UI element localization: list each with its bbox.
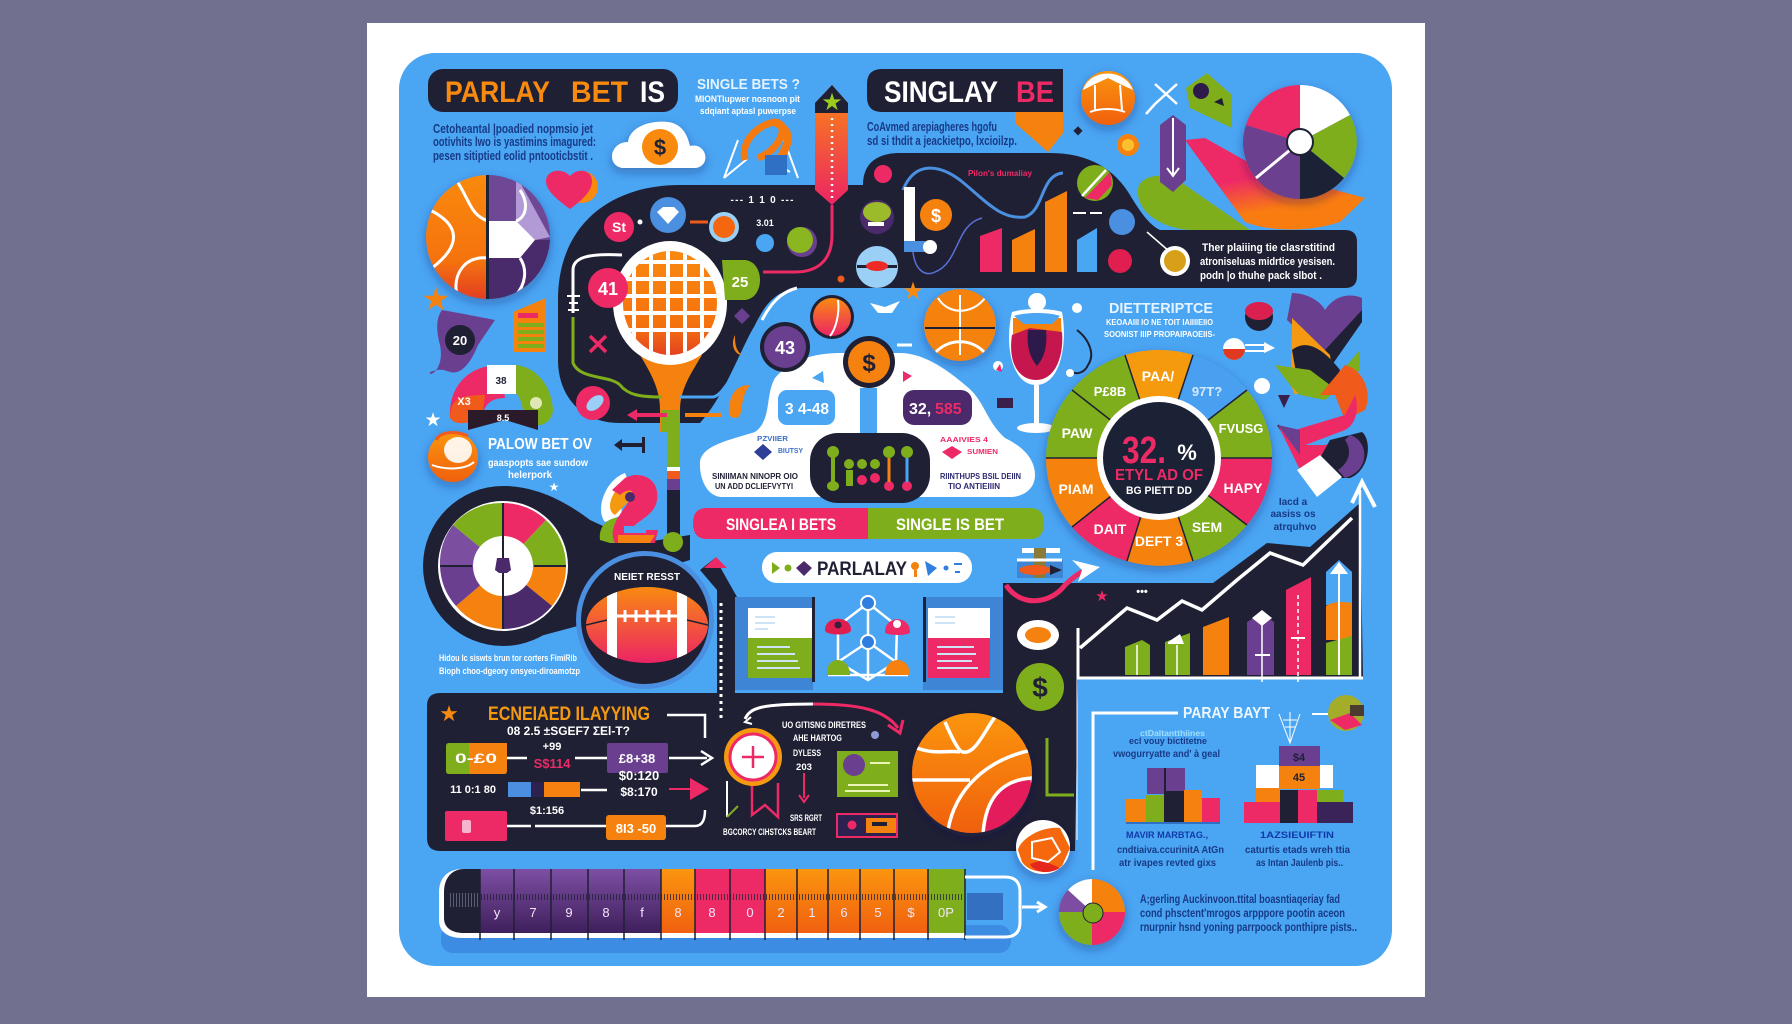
lower right heading: PARAY BAYT (1183, 705, 1270, 722)
medal text: 203 (796, 762, 812, 772)
white hook (904, 187, 915, 245)
caption left blocks: MAVIR MARBTAG., (1126, 830, 1208, 840)
icon: white X (1146, 84, 1177, 114)
parlalay pill: PARLALAY (817, 559, 907, 580)
pie wedge (453, 503, 503, 566)
lower panel title: ECNEIAED ILAYYING (488, 704, 650, 725)
medal text: SRS RGRT (790, 813, 822, 823)
donut labels: 97T? (1192, 384, 1222, 399)
ruler labels: 7 (529, 905, 537, 920)
palow bet note: PALOW BET OV (488, 436, 592, 453)
wine glass (1009, 293, 1064, 433)
segment (1159, 390, 1272, 458)
closing paragraph: rnurpnir hsnd yoning parrpoock ponthipre pists.. (1140, 920, 1357, 934)
bar (1326, 560, 1352, 675)
ruler labels: 0 (746, 905, 754, 920)
bar (1247, 613, 1274, 675)
callout text: Ther plaiiing tie clasrstitind (1202, 242, 1335, 254)
icon: purple location pin: 20 (453, 333, 467, 348)
box: purple: £8+38 (619, 751, 655, 766)
network diagram (825, 596, 910, 680)
stacked blocks right: $4 (1293, 752, 1306, 764)
node: blue diamond (650, 197, 686, 233)
singles bar: SINGLE IS BET (896, 515, 1005, 534)
node: orange dot (838, 276, 844, 282)
dark pin chart (810, 433, 930, 503)
label: Pilon's dumaliay (968, 168, 1032, 178)
header right: SINGLAY (884, 76, 998, 109)
stacked blocks left (1126, 768, 1220, 824)
node: pink small (874, 165, 892, 183)
donut labels: SEM (1192, 519, 1222, 535)
donut labels: PIAM (1058, 481, 1094, 497)
segment (1159, 355, 1247, 458)
bar (1203, 617, 1229, 675)
single bets note: MIONTIupwer nosnoon pit (695, 94, 801, 105)
parlalay pill (762, 552, 972, 583)
small cloud text left: BIUTSY (778, 446, 803, 455)
bar (1286, 577, 1311, 675)
rainbow gauge: 38 (495, 376, 507, 387)
value box: 34-48 (778, 390, 835, 425)
intro text right: CoAvmed arepiagheres hgofu (867, 120, 997, 134)
box: orange: 8I3 -50 (616, 821, 656, 836)
small cloud text right: TIO ANTIEIIIN (948, 482, 1000, 491)
big basketball (912, 713, 1040, 835)
header right: BE (1016, 76, 1054, 109)
box: purple (607, 743, 668, 773)
description heading: KEOAAIII IO NE TOIT IAIIIIEIIO (1106, 317, 1213, 327)
stacked blocks right: 45 (1293, 772, 1305, 784)
node: green ball (787, 227, 817, 257)
icon: top right ball (1081, 71, 1135, 125)
segment (1125, 350, 1193, 458)
caption right blocks: caturtis etads wreh ttia (1245, 845, 1350, 856)
pie wedge (440, 566, 503, 606)
ruler labels (494, 905, 954, 920)
intro text right: sd si thdit a jeackietpo, lxcioilzp. (867, 134, 1017, 148)
closing paragraph: cond phsctent'mrogos arpppore pootin aceon (1140, 906, 1345, 920)
caption left blocks: cndtiaiva.ccurinitA AtGn (1117, 845, 1224, 856)
ruler labels: 2 (777, 905, 785, 920)
top right ribbon graphic (1138, 115, 1365, 230)
donut labels: DEFT 3 (1135, 533, 1183, 549)
ruler labels: 0P (938, 905, 954, 920)
palow bet note: helerpork (508, 470, 552, 481)
connector lines (507, 715, 707, 826)
note near chart: aasiss os (1270, 509, 1316, 520)
icon: ball arrow (1223, 338, 1275, 360)
caption left blocks (1117, 830, 1224, 869)
closing paragraph: A;gerling Auckinvoon.ttital boasntiaqeriay fad (1140, 892, 1340, 906)
pink triangle marker (704, 557, 727, 568)
medal text: BGCORCY CIHSTCKS BEART (723, 827, 816, 837)
top right pie (1243, 85, 1357, 199)
icon: flame (729, 385, 750, 418)
green L connector (1047, 738, 1074, 795)
label: 11 0:1 80 (450, 784, 496, 796)
pink curved arrow (1006, 548, 1100, 601)
green card (837, 751, 898, 797)
small cloud text right: RIINTHUPS BSIL DEIIN (940, 472, 1021, 481)
box: pink (445, 811, 507, 841)
trend line (1080, 518, 1352, 648)
dollar coin (843, 336, 895, 388)
ruler labels: 6 (840, 905, 848, 920)
caption right blocks: 1AZSIEUIFTIN (1260, 830, 1334, 840)
pie wedge (456, 566, 503, 629)
dotted connector (720, 603, 722, 722)
big basketball left (426, 175, 550, 299)
bar: tricolour (508, 782, 580, 797)
donut labels: ETYL AD OF (1115, 467, 1203, 484)
purple 43 bubble: 43 (775, 338, 795, 358)
football badge (576, 551, 714, 689)
lower right note: ecl vouy bictitetne (1129, 736, 1207, 747)
small cloud text right: SUMIEN (967, 447, 998, 456)
ruler labels: 9 (565, 905, 573, 920)
pie wedge (503, 520, 566, 566)
description heading: SOONIST IIIP PROPAIPAOEIIS- (1104, 329, 1215, 339)
segment (1046, 390, 1159, 458)
intro text right (867, 120, 1017, 148)
ruler labels: 8 (602, 905, 610, 920)
icon: purple location pin (430, 310, 495, 374)
card: pink (928, 608, 990, 678)
icon: dark arrow (614, 437, 645, 453)
arrow: pink (669, 778, 709, 800)
icon: cloud with dollar coin (612, 122, 705, 168)
pink node (1108, 249, 1132, 273)
top chart in network (903, 165, 1135, 274)
donut labels (1058, 368, 1263, 549)
singles bar: SINGLEA I BETS (726, 515, 836, 534)
donut labels: FVUSG (1219, 421, 1263, 436)
pink 41 bubble: 41 (598, 279, 618, 299)
dollar coin: $ (931, 206, 941, 226)
icon: pink X (590, 336, 606, 352)
small cloud text left: PZVIIER (757, 434, 789, 443)
lower panel title (439, 701, 650, 738)
icon: small arrow tree (1279, 712, 1300, 743)
node: blue ball (856, 246, 898, 288)
icon: heart (546, 171, 598, 209)
segment (1046, 458, 1159, 527)
intro text left: ootivhits lwo is yastimins imagured: (433, 134, 596, 149)
note near chart: Iacd a (1279, 497, 1308, 508)
pie wedge (503, 503, 546, 566)
dark vertical and lower panel (427, 503, 1363, 851)
medal text: UO GITISNG DIRETRES (782, 720, 866, 730)
small cloud text left: SINIIMAN NINOPR OIO (712, 472, 798, 481)
intro text left (433, 121, 596, 163)
ruler labels: f (640, 905, 644, 920)
header left: PARLAY (445, 76, 550, 109)
card: green (748, 608, 812, 678)
description heading (1104, 300, 1215, 339)
donut labels: DAIT (1094, 521, 1127, 537)
icon: green dollar button: $ (1032, 672, 1048, 703)
icon: orange crescent (733, 335, 742, 355)
note under pie: Hidou Ic siswts brun tor corters FimiRib (439, 653, 577, 664)
label: S$114 (534, 756, 571, 771)
node: small blue (756, 234, 774, 252)
network path lines (567, 255, 768, 397)
stub: orange (685, 413, 722, 417)
bar (1077, 228, 1097, 272)
node: green purple ball (860, 200, 894, 234)
caption right blocks: as Intan Jaulenb pis.. (1256, 858, 1343, 869)
ruler labels: y (494, 905, 501, 920)
pie wedge (503, 566, 566, 606)
flow diagram (445, 715, 712, 841)
icon: dark diamond: ◆ (1073, 123, 1083, 137)
description heading: DIETTERIPTCE (1109, 300, 1213, 317)
dark network panel (558, 153, 1357, 423)
segment (1072, 458, 1159, 561)
green 25 tab (722, 260, 760, 300)
icon: white boat (870, 301, 900, 313)
singles bar (693, 508, 1044, 539)
panel edge line (1076, 678, 1078, 840)
medal text: AHE HARTOG (793, 733, 842, 743)
racket (613, 240, 727, 552)
palow bet note: gaaspopts sae sundow (488, 458, 588, 469)
closing paragraph (1140, 892, 1357, 934)
note under pie: Bioph choo-dgeory onsyeu-diroamotzp (439, 666, 580, 677)
note near chart (1270, 497, 1316, 533)
green 25 tab: 25 (732, 274, 748, 291)
segment (1159, 458, 1272, 525)
small cloud text left (712, 434, 803, 491)
segment (1127, 458, 1193, 566)
header left: BET (571, 76, 628, 109)
ruler shadow (441, 925, 1011, 953)
axes (1078, 628, 1363, 678)
network nodes (576, 165, 898, 421)
decor: dots: ••• (1136, 586, 1148, 598)
icon: coin (1117, 134, 1139, 156)
icon: small ball with line (1312, 695, 1364, 731)
icon: cloud with dollar coin: $ (654, 135, 666, 160)
icon: white star: ★ (424, 410, 442, 431)
header left: IS (640, 76, 665, 109)
box: orange (606, 815, 666, 840)
bar (980, 228, 1002, 272)
blue stem in cloud (860, 388, 877, 436)
lower panel title: ★ (439, 701, 459, 726)
node: orange ball (709, 212, 739, 242)
callout text (1147, 232, 1335, 282)
label: $1:156 (530, 805, 564, 817)
donut labels: HAPY (1224, 480, 1263, 496)
donut chart (1046, 350, 1272, 566)
medal text: DYLESS (793, 748, 821, 758)
small cloud text left: UN ADD DCLIEFVYTYI (715, 482, 793, 491)
icon: small purple arrow (734, 308, 750, 324)
label: 110: --- 1 1 0 --- (730, 195, 794, 206)
icon: ball node (576, 386, 610, 420)
hook foot (904, 241, 925, 252)
ruler labels: 5 (874, 905, 882, 920)
ribbon marker with star: ★ (821, 89, 843, 116)
icon: orange ring on stand (724, 122, 798, 178)
label: $8:170 (620, 785, 658, 799)
rainbow gauge (450, 365, 553, 430)
value box: 32,585: 585 (935, 401, 962, 418)
icon: orange star: ★ (422, 281, 450, 317)
value box: 34-48: 3 4-48 (785, 401, 829, 418)
icon: small blue triangle (812, 371, 824, 383)
lower right section frame (1093, 713, 1178, 870)
node: St (604, 212, 634, 242)
note near chart: atrquhvo (1274, 522, 1316, 533)
ruler (439, 869, 965, 940)
rainbow gauge: X3 (457, 396, 471, 408)
donut labels: % (1177, 440, 1197, 465)
small decor gear (871, 731, 879, 739)
single bets note: SINGLE BETS ? (697, 76, 800, 93)
dollar coin: $ (862, 350, 876, 377)
ruler bracket and arrow (965, 877, 1045, 937)
intro text left: pesen sitiptied eolid pntooticbstit . (433, 148, 593, 163)
ring pie chart (423, 486, 583, 646)
icon: green dollar button (1016, 663, 1064, 711)
icon: eye (1017, 620, 1059, 650)
donut labels: BG PIETT DD (1126, 485, 1192, 497)
icon: stylised number 2 (600, 473, 658, 543)
icon: green tag (1186, 73, 1232, 128)
blue panel (399, 53, 1392, 966)
icon: red button (1245, 302, 1273, 331)
segment (1072, 355, 1159, 458)
bar (1012, 229, 1035, 272)
small tag card (837, 814, 897, 837)
decor: pink star: ★ (1095, 588, 1109, 605)
caption right blocks (1245, 830, 1350, 869)
label: 3.01: 3.01 (756, 218, 774, 228)
rainbow gauge: 8.5 (497, 413, 509, 423)
decor dots right (1254, 378, 1290, 440)
ruler labels: 8 (674, 905, 682, 920)
soccer ball (1016, 820, 1070, 874)
ribbon marker with star (763, 85, 848, 272)
donut labels: PAA/ (1142, 368, 1174, 384)
intro text left: Cetoheantal |poadied nopmsio jet (433, 121, 594, 136)
value box: 32,585 (903, 390, 972, 425)
stacked blocks right (1244, 746, 1353, 823)
small pie (1059, 879, 1125, 945)
white sheet (367, 23, 1425, 997)
icon: document (513, 298, 546, 352)
line chart (1078, 482, 1375, 682)
ball (1077, 165, 1113, 201)
callout text: podn |o thuhe pack slbot . (1200, 270, 1322, 282)
blue node (1109, 209, 1135, 235)
football badge: NEIET RESST (614, 572, 680, 583)
ruler labels: $ (907, 905, 915, 920)
white cloud panel (700, 353, 1035, 497)
right puzzle shapes (1275, 293, 1368, 497)
label: $0:120 (619, 768, 659, 783)
lower right note: vwogurryatte and' à geal (1113, 748, 1220, 760)
bar (1045, 191, 1067, 272)
bar (1125, 640, 1150, 675)
cloud rim stroke (762, 288, 797, 320)
arrow: pink left (627, 409, 667, 421)
ruler labels: 8 (708, 905, 716, 920)
donut labels: 32. (1122, 430, 1166, 472)
ruler labels: 1 (808, 905, 816, 920)
pie wedge (503, 566, 552, 629)
header left (428, 69, 678, 112)
caption left blocks: atr ivapes revted gixs (1119, 858, 1216, 869)
box: green orange: 0-£0 (455, 750, 497, 766)
segment (1159, 458, 1247, 561)
note under pie (439, 653, 580, 677)
lower right note (1113, 728, 1220, 760)
basketball center (924, 289, 996, 361)
bar (1165, 633, 1190, 675)
purple 43 bubble (760, 322, 810, 372)
donut labels: PAW (1062, 425, 1093, 441)
lower right note: ctDaltantthiines (1140, 728, 1205, 738)
blue hook curve (903, 168, 1063, 217)
orange ball (810, 295, 854, 339)
medal (724, 728, 782, 817)
thin curve (913, 218, 982, 274)
palow bet note (488, 436, 592, 481)
label: +99 (543, 741, 561, 753)
box: green orange (446, 743, 507, 774)
single bets note: sdqiant aptasl puwerpse (700, 106, 796, 117)
white ball (923, 240, 937, 254)
medal text (723, 720, 866, 837)
icon: small white star: ★ (549, 480, 559, 494)
lower panel title: 08 2.5 ±SGEF7 ΣEl-T? (507, 724, 630, 738)
small cloud text right: AAAIVIES 4 (940, 435, 989, 444)
cards panel (735, 596, 1003, 690)
icon: orange star: ★ (902, 278, 924, 305)
donut labels: P£8B (1094, 384, 1126, 399)
node: St: St (612, 219, 626, 235)
small cloud text right (940, 435, 1021, 491)
value box: 32,585: 32, (909, 401, 931, 418)
dark pie connector panel (503, 486, 690, 646)
dashes (1073, 212, 1102, 214)
icon: small ball (428, 432, 478, 482)
pink 41 bubble (588, 268, 628, 308)
dollar coin (920, 199, 952, 231)
single bets note (695, 76, 801, 117)
arc arrow (745, 704, 903, 733)
center disc (1097, 396, 1221, 520)
pie wedge (440, 525, 503, 566)
callout text: atroniseluas midrtice yesisen. (1200, 256, 1335, 268)
header right (867, 69, 1063, 152)
decor dots (897, 303, 1091, 408)
